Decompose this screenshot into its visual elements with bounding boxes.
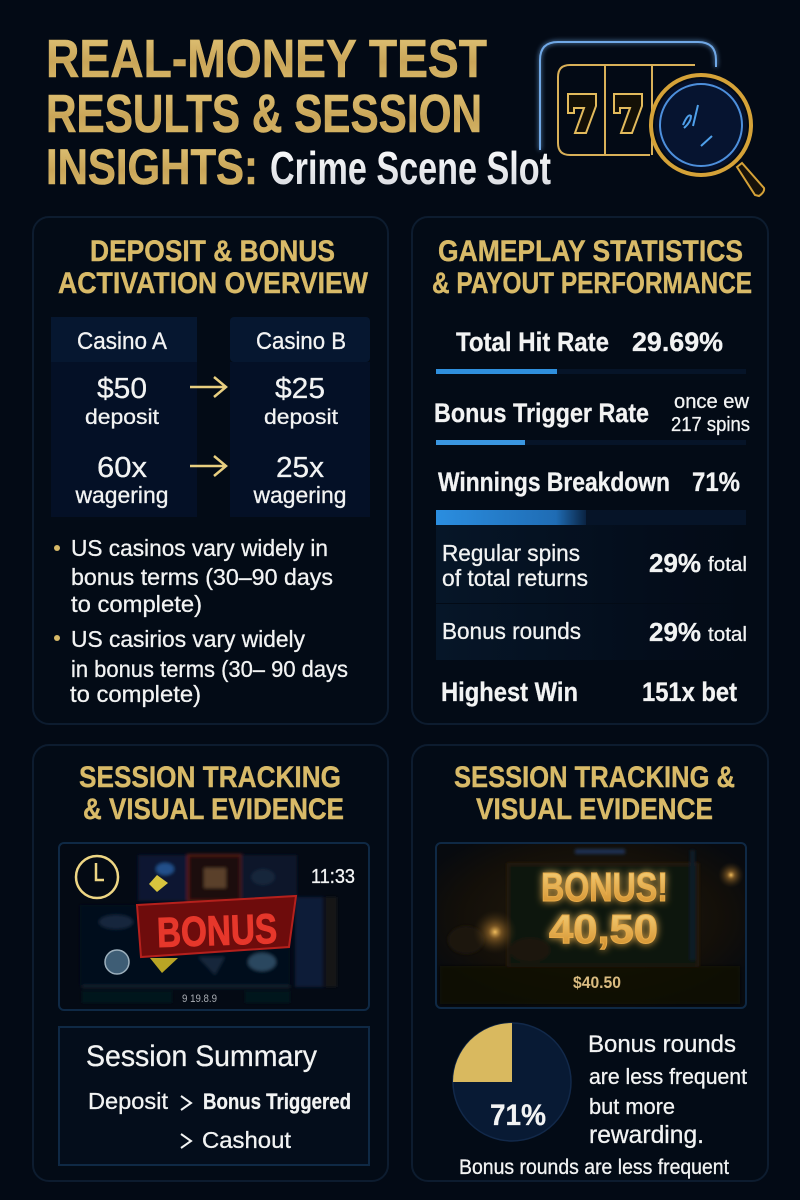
- bullet list: US casirios vary widely: [71, 626, 305, 652]
- arrow: deposit comparison: [190, 377, 226, 397]
- panel: deposit and bonus activation overview: [33, 217, 388, 724]
- heading: session tracking left: SESSION TRACKING: [79, 761, 341, 794]
- stat: bonus trigger rate: 217 spins: [671, 414, 750, 436]
- column: casino A: deposit: [85, 406, 159, 429]
- column: casino B: [230, 317, 370, 517]
- heading: gameplay statistics: GAMEPLAY STATISTICS: [438, 235, 743, 268]
- row: regular spins: of total returns: [442, 565, 588, 591]
- row: bonus rounds: total: [708, 624, 747, 646]
- title: INSIGHTS:: [46, 139, 258, 195]
- heading: session tracking right: [454, 761, 735, 826]
- stat: total hit rate: Total Hit Rate: [456, 327, 609, 357]
- bullet list: to complete): [71, 591, 202, 617]
- banner: bonus: BONUS: [156, 905, 278, 956]
- row: regular spins: Regular spins: [442, 540, 580, 566]
- title: [46, 29, 551, 195]
- row: bonus rounds: Bonus rounds: [442, 618, 581, 644]
- text: bonus rounds note: rewarding.: [589, 1121, 704, 1149]
- heading: session tracking left: [79, 761, 344, 826]
- row: bonus rounds: [436, 604, 747, 660]
- bonus amount text: [541, 864, 668, 952]
- heading: deposit and bonus: DEPOSIT & BONUS: [90, 235, 335, 268]
- heading: deposit and bonus: ACTIVATION OVERVIEW: [58, 267, 369, 300]
- title: Crime Scene Slot: [270, 142, 551, 194]
- panel: session tracking, right: [412, 745, 768, 1181]
- session summary box: Bonus Triggered: [203, 1089, 351, 1114]
- row: regular spins: [436, 525, 747, 603]
- text: bonus rounds note: are less frequent: [589, 1064, 747, 1089]
- column: casino B: 25x: [276, 452, 325, 484]
- bullet list: to complete): [70, 681, 201, 707]
- row: regular spins: 29%: [649, 548, 701, 578]
- column: casino B: deposit: [264, 406, 338, 429]
- stat: winnings breakdown: 71%: [692, 467, 740, 497]
- column: casino B: $25: [275, 373, 325, 405]
- column: casino A: [51, 317, 197, 517]
- stat: bonus trigger rate: [434, 391, 750, 445]
- bullet list: bonus terms (30–90 days: [71, 564, 333, 590]
- text: bonus rounds note: Bonus rounds: [588, 1031, 736, 1058]
- panel: gameplay statistics and payout performance: [412, 217, 768, 724]
- column: casino A: Casino A: [77, 328, 167, 355]
- stat: bonus trigger rate: Bonus Trigger Rate: [434, 398, 649, 428]
- heading: deposit and bonus: [58, 235, 369, 300]
- stat: highest win: [441, 677, 737, 707]
- screenshot: bonus win: [436, 843, 746, 1008]
- icon: slot machine under magnifying glass: [540, 42, 764, 196]
- heading: session tracking right: SESSION TRACKING &: [454, 761, 735, 794]
- text: bonus rounds note: [588, 1031, 747, 1149]
- column: casino A: 60x: [97, 452, 148, 484]
- bullet list: in bonus terms (30– 90 days: [71, 656, 348, 682]
- payout value: $40.50: [573, 973, 621, 992]
- session summary box: Cashout: [202, 1127, 292, 1153]
- session time: 11:33: [311, 866, 355, 888]
- session summary box: Session Summary: [86, 1040, 317, 1073]
- stat: total hit rate: 29.69%: [632, 327, 723, 357]
- icon: clock: [76, 856, 118, 898]
- bonus amount text: 40,50: [549, 906, 658, 952]
- game balance: 9 19.8.9: [182, 993, 217, 1005]
- session summary box: [59, 1027, 369, 1165]
- arrow: wagering comparison: [190, 456, 226, 476]
- panel: session tracking, left: [33, 745, 388, 1181]
- bonus amount text: BONUS!: [541, 864, 668, 910]
- stat: total hit rate: [436, 327, 746, 374]
- bullet list: [54, 535, 348, 707]
- column: casino A: $50: [97, 373, 147, 405]
- screenshot: slot game with bonus banner: [59, 843, 369, 1010]
- title: REAL-MONEY TEST: [46, 29, 487, 89]
- stat: bonus trigger rate: once ew: [674, 391, 750, 413]
- column: casino B: Casino B: [256, 328, 346, 355]
- pie chart: 71%: [453, 1023, 571, 1141]
- heading: session tracking right: VISUAL EVIDENCE: [476, 793, 713, 826]
- stat: winnings breakdown: [436, 467, 746, 525]
- session summary box: Deposit: [88, 1088, 169, 1114]
- column: casino B: wagering: [253, 482, 346, 508]
- caption: Bonus rounds are less frequent: [459, 1156, 729, 1179]
- heading: session tracking left: & VISUAL EVIDENCE: [83, 793, 344, 826]
- pie chart: 71%: 71%: [490, 1099, 546, 1132]
- stat: highest win: Highest Win: [441, 677, 578, 707]
- row: bonus rounds: 29%: [649, 617, 701, 647]
- bullet list: US casinos vary widely in: [71, 535, 328, 561]
- heading: gameplay statistics: [432, 235, 752, 300]
- text: bonus rounds note: but more: [589, 1094, 675, 1119]
- stat: highest win: 151x bet: [642, 677, 737, 707]
- column: casino A: wagering: [75, 482, 168, 508]
- row: regular spins: fotal: [708, 554, 747, 576]
- stat: winnings breakdown: Winnings Breakdown: [438, 467, 670, 497]
- title: RESULTS & SESSION: [46, 84, 482, 144]
